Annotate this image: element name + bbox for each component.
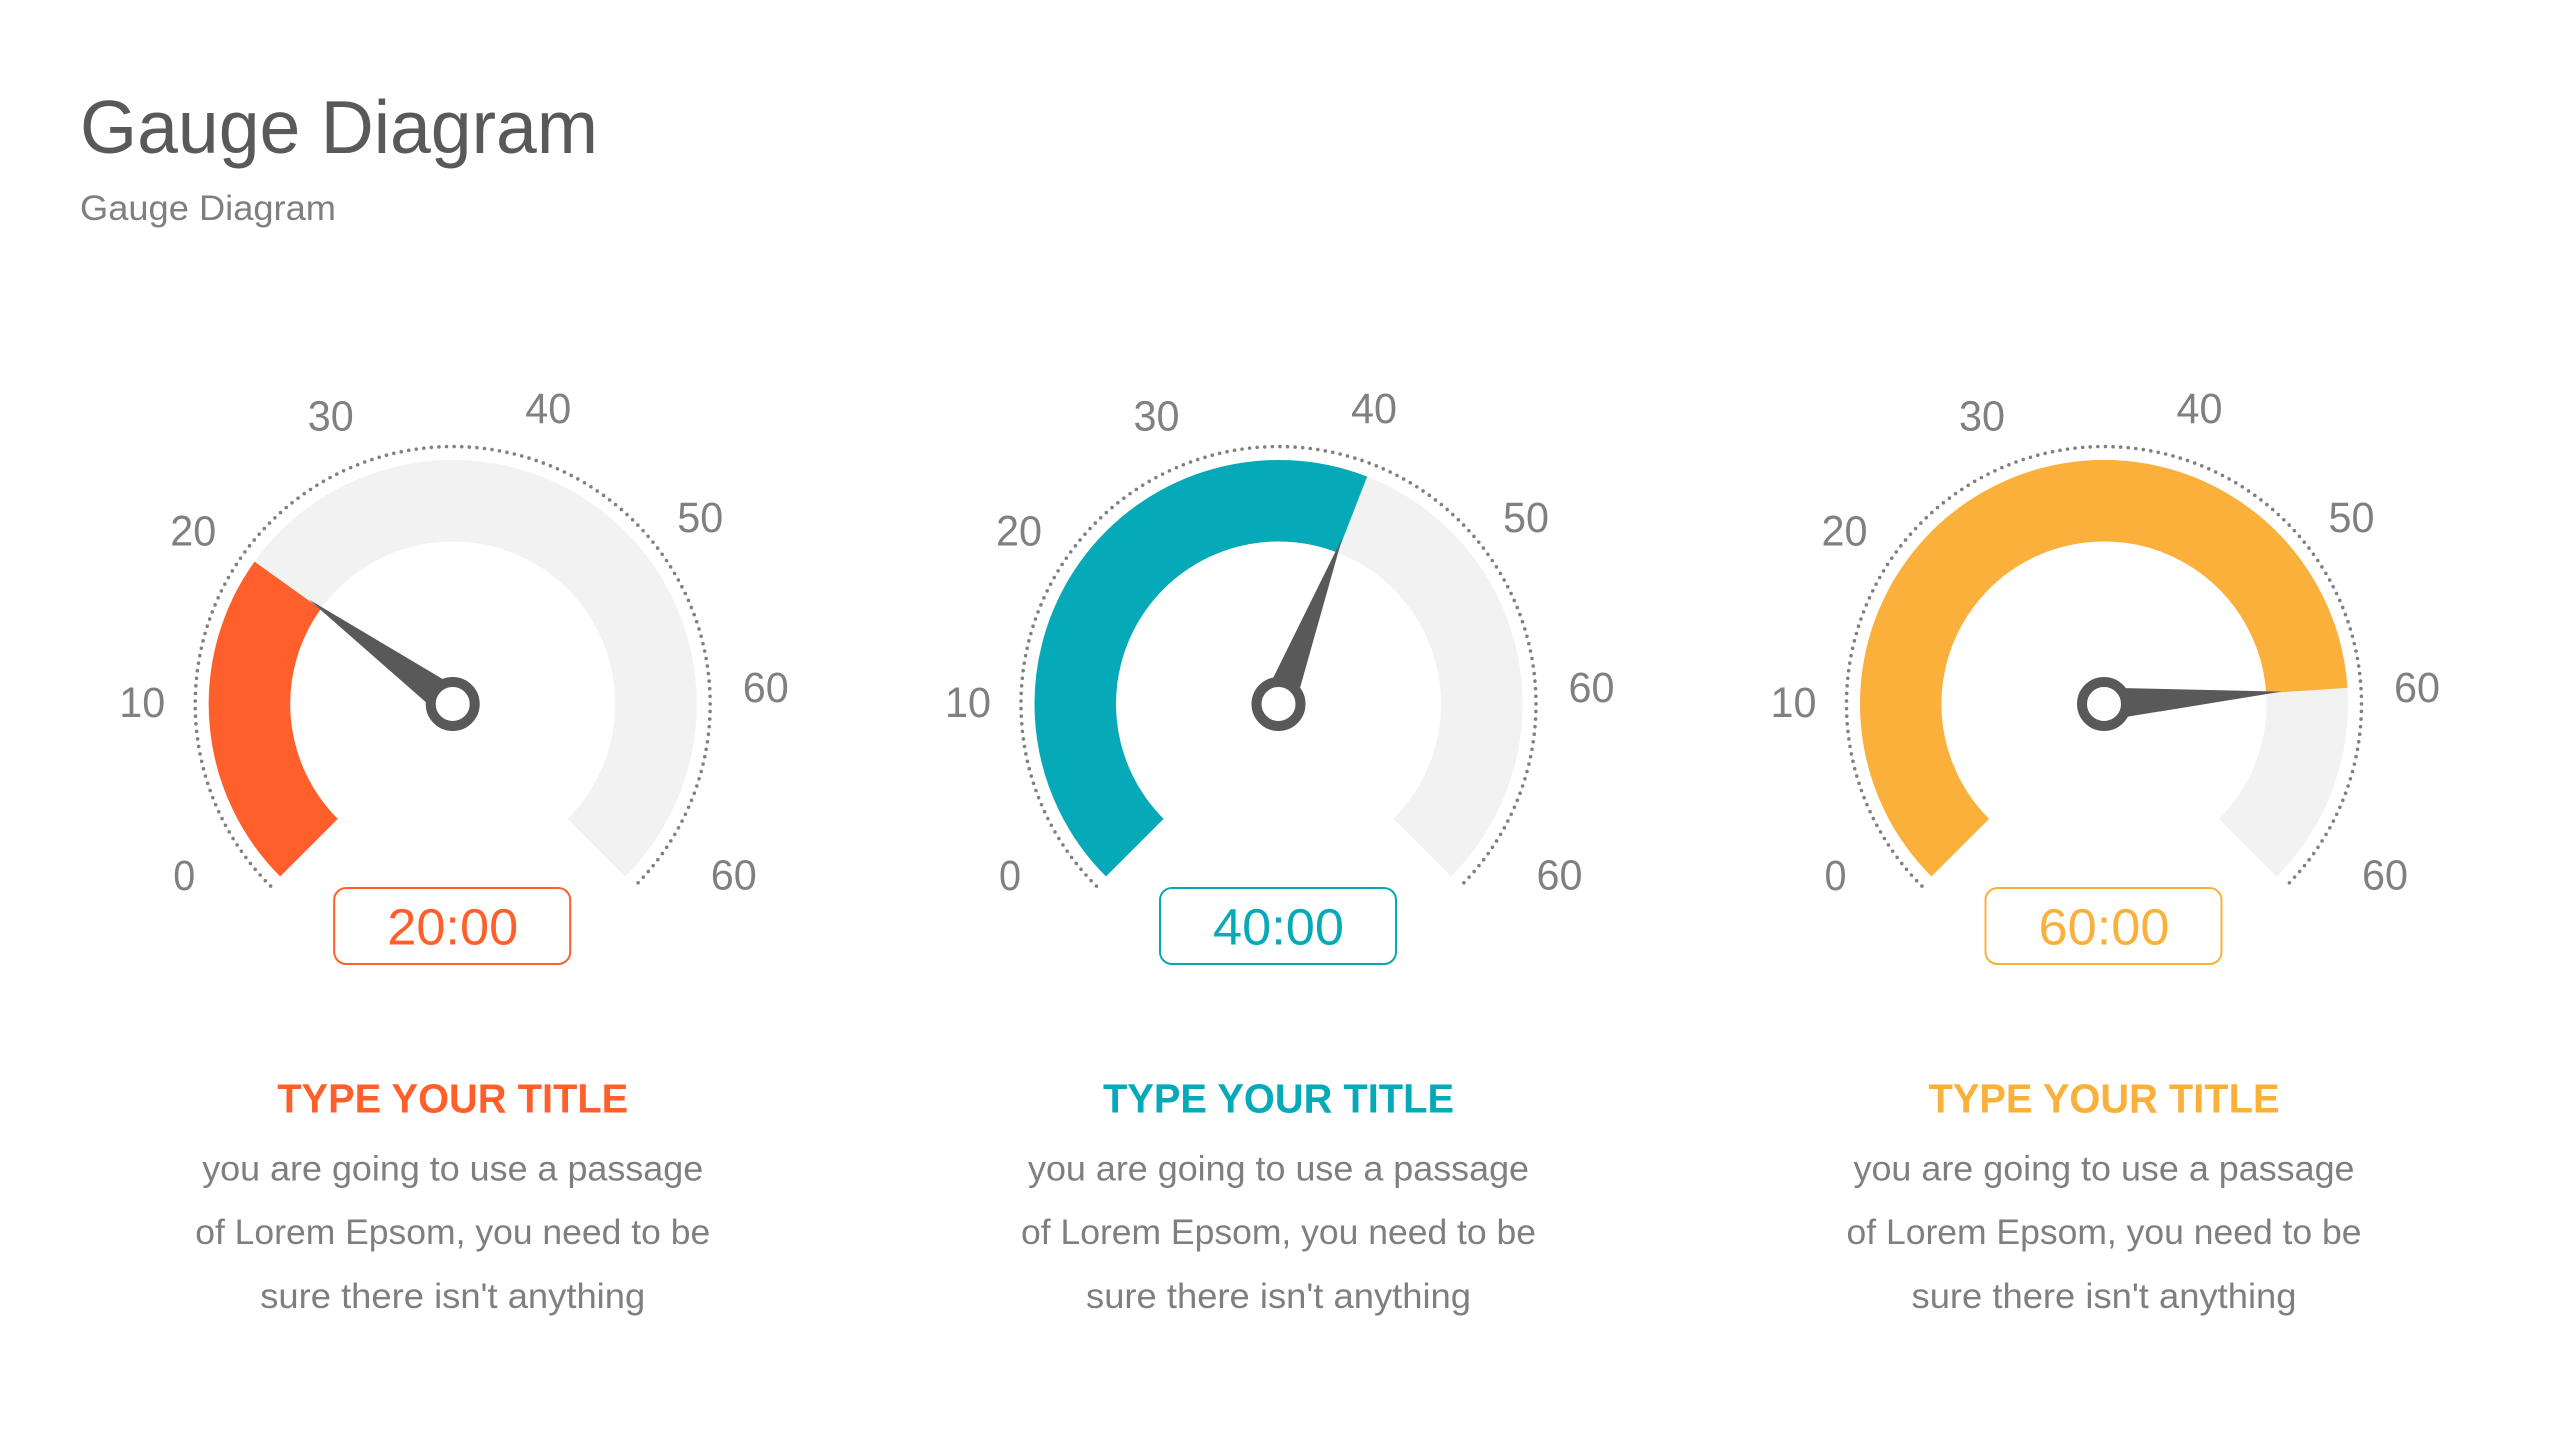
scale numbers: 60 bbox=[743, 664, 789, 712]
scale numbers: 60 bbox=[711, 852, 757, 900]
time value box bbox=[1160, 888, 1396, 964]
gauge value arc bbox=[1901, 501, 2307, 848]
scale numbers bbox=[119, 385, 789, 900]
text block: gauge 20:00 caption: you are going to use a passage bbox=[202, 1150, 703, 1188]
scale numbers: 30 bbox=[1134, 392, 1180, 440]
text block: gauge 60:00 caption bbox=[1846, 1076, 2362, 1316]
scale numbers: 60 bbox=[2362, 852, 2408, 900]
scale numbers bbox=[945, 385, 1614, 900]
scale numbers: 20 bbox=[170, 508, 216, 556]
time value box bbox=[1986, 888, 2222, 964]
needle bbox=[300, 588, 443, 702]
scale numbers: 20 bbox=[996, 508, 1042, 556]
gauge track bbox=[1075, 501, 1482, 848]
scale numbers: 20 bbox=[1822, 508, 1868, 556]
panel: gauge 40:00 bbox=[945, 385, 1614, 964]
scale numbers bbox=[1770, 385, 2440, 900]
scale numbers: 50 bbox=[2328, 494, 2374, 542]
dotted outer scale bbox=[1846, 447, 2362, 886]
text block: gauge 60:00 caption: TYPE YOUR TITLE bbox=[1928, 1076, 2280, 1122]
scale numbers: 10 bbox=[1770, 679, 1816, 727]
text block: gauge 40:00 caption bbox=[1021, 1076, 1536, 1316]
text block: gauge 20:00 caption bbox=[195, 1076, 710, 1316]
needle hub bbox=[1256, 682, 1300, 726]
panel: gauge 60:00 bbox=[1770, 385, 2440, 964]
text block: gauge 40:00 caption: TYPE YOUR TITLE bbox=[1103, 1076, 1454, 1122]
scale numbers: 10 bbox=[945, 679, 991, 727]
gauge track bbox=[249, 501, 656, 848]
text block: gauge 60:00 caption: you are going to use a passage bbox=[1854, 1150, 2354, 1188]
scale numbers: 30 bbox=[308, 392, 354, 440]
scale numbers: 60 bbox=[1568, 664, 1614, 712]
subtitle: Gauge Diagram bbox=[80, 189, 336, 228]
scale numbers: 40 bbox=[2176, 385, 2222, 433]
time value box: 40:00 bbox=[1213, 898, 1344, 956]
text block: gauge 40:00 caption: sure there isn't anything bbox=[1086, 1277, 1471, 1316]
title: Gauge Diagram bbox=[80, 85, 598, 169]
scale numbers: 50 bbox=[677, 494, 723, 542]
needle hub bbox=[2082, 682, 2126, 726]
scale numbers: 40 bbox=[1351, 385, 1397, 433]
text block: gauge 40:00 caption: of Lorem Epsom, you need to be bbox=[1021, 1213, 1536, 1252]
gauge value arc bbox=[249, 585, 309, 848]
scale numbers: 30 bbox=[1959, 392, 2005, 440]
scale numbers: 40 bbox=[525, 385, 571, 433]
scale numbers: 10 bbox=[119, 679, 165, 727]
scale numbers: 60 bbox=[1536, 852, 1582, 900]
text block: gauge 60:00 caption: of Lorem Epsom, you need to be bbox=[1846, 1213, 2362, 1252]
scale numbers: 0 bbox=[1824, 852, 1846, 900]
needle hub bbox=[431, 682, 475, 726]
needle bbox=[2126, 677, 2283, 717]
time value box bbox=[334, 888, 570, 964]
scale numbers: 0 bbox=[999, 852, 1021, 900]
gauge value arc bbox=[1075, 501, 1352, 848]
text block: gauge 40:00 caption: you are going to use a passage bbox=[1028, 1150, 1529, 1188]
needle bbox=[1273, 533, 1356, 688]
scale numbers: 50 bbox=[1503, 494, 1549, 542]
dotted outer scale bbox=[195, 447, 710, 886]
text block: gauge 20:00 caption: sure there isn't anything bbox=[260, 1277, 645, 1316]
dotted outer scale bbox=[1021, 447, 1536, 886]
text block: gauge 20:00 caption: of Lorem Epsom, you need to be bbox=[195, 1213, 710, 1252]
text block: gauge 20:00 caption: TYPE YOUR TITLE bbox=[277, 1076, 628, 1122]
time value box: 20:00 bbox=[387, 898, 518, 956]
scale numbers: 0 bbox=[173, 852, 195, 900]
gauge track bbox=[1901, 501, 2307, 848]
text block: gauge 60:00 caption: sure there isn't anything bbox=[1912, 1277, 2296, 1316]
time value box: 60:00 bbox=[2038, 898, 2170, 956]
panel: gauge 20:00 bbox=[119, 385, 789, 964]
scale numbers: 60 bbox=[2394, 664, 2440, 712]
